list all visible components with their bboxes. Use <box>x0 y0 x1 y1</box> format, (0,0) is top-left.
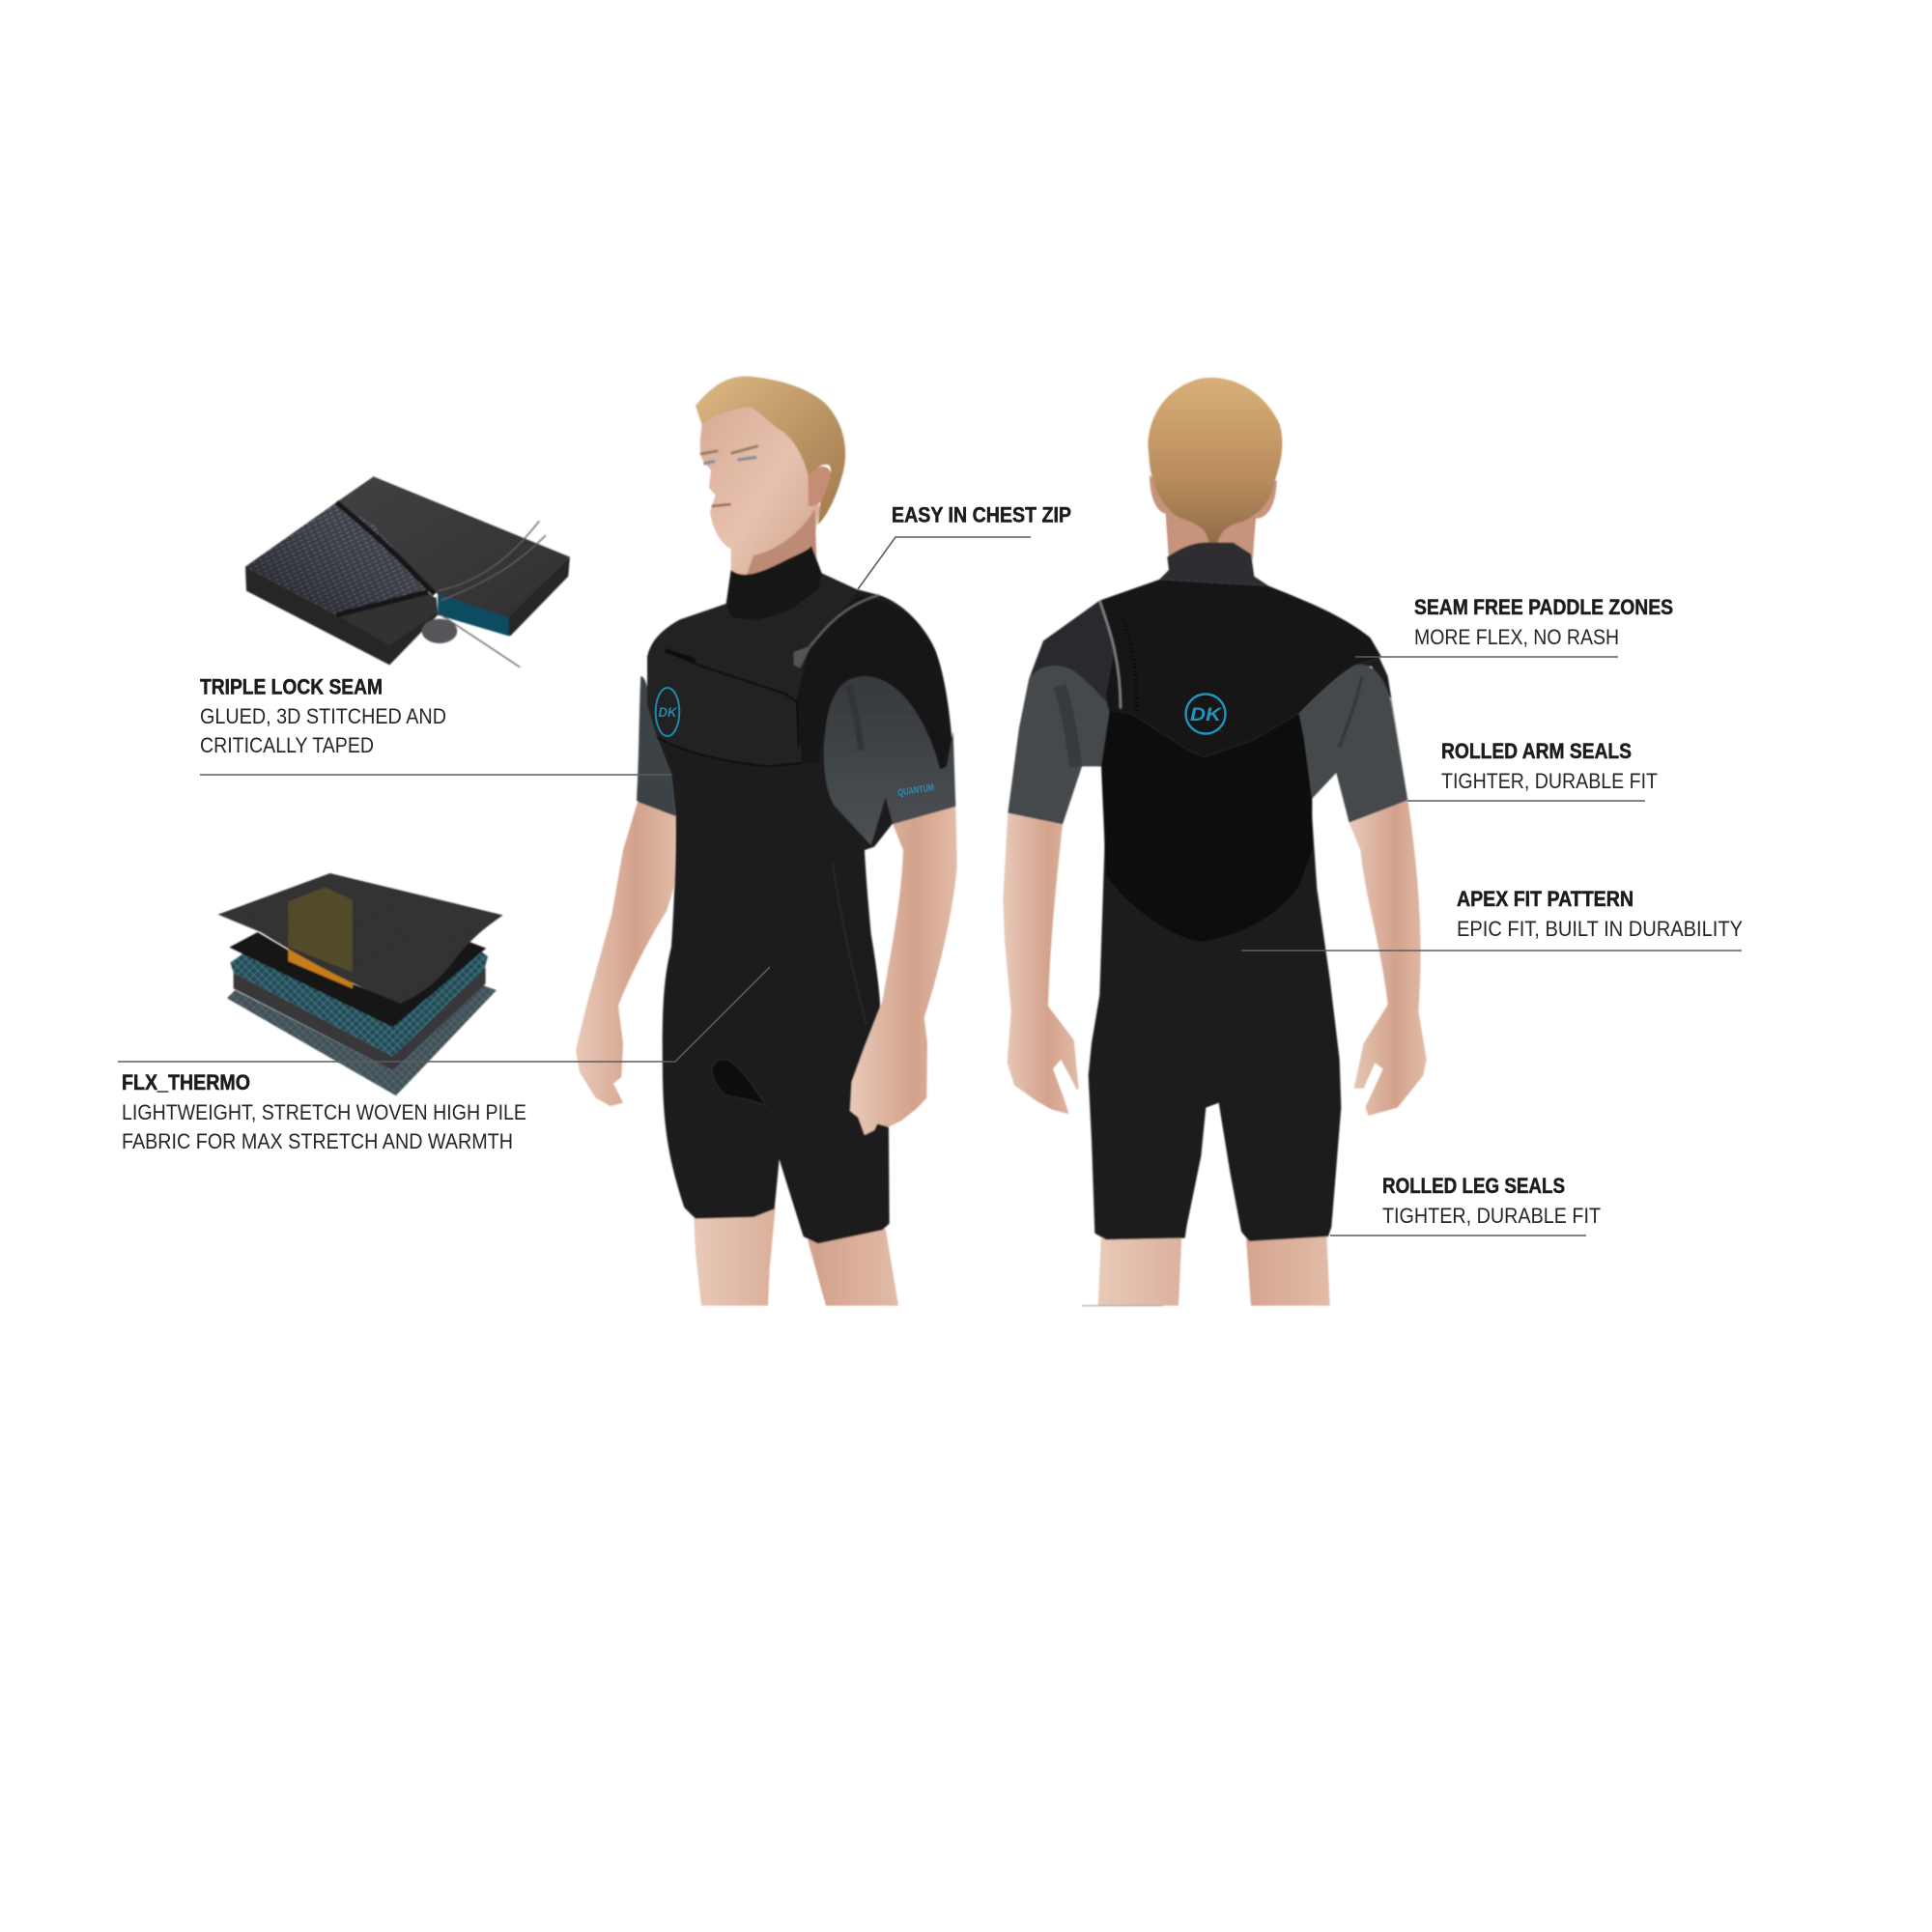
seam stitching <box>336 502 435 615</box>
right shoulder <box>797 596 953 770</box>
figure: front view wearing wetsuit <box>576 376 957 1306</box>
top fabric <box>336 476 570 617</box>
callout: flx thermo: FABRIC FOR MAX STRETCH AND WARMTH <box>122 1129 513 1153</box>
hair <box>696 376 845 525</box>
collar <box>726 546 822 619</box>
grey bottom edge <box>1082 1304 1162 1307</box>
neck and ears <box>1150 475 1277 560</box>
left arm and hand <box>576 802 675 1106</box>
dark foam block <box>234 968 486 1070</box>
side faces <box>245 557 570 665</box>
right sleeve panel <box>824 676 955 845</box>
logo: front chest <box>656 688 679 736</box>
swatch: flx thermo layers <box>218 873 503 1095</box>
side seam <box>833 863 867 1024</box>
figure: back view wearing wetsuit <box>1003 378 1427 1306</box>
callout: flx thermo: FLX_THERMO <box>122 1070 250 1094</box>
thread lines <box>438 521 546 668</box>
top sheet <box>218 873 503 1003</box>
callout: apex fit pattern <box>1241 887 1743 951</box>
callout: triple lock seam: TRIPLE LOCK SEAM <box>200 674 383 699</box>
right arm and hand <box>1350 800 1427 1116</box>
callout: seam free paddle zones: MORE FLEX, NO RASH <box>1414 625 1619 649</box>
callout: rolled arm seals: ROLLED ARM SEALS <box>1441 739 1632 763</box>
left shoulder <box>1029 601 1130 722</box>
translucent heat column <box>288 887 353 973</box>
suit body <box>647 573 953 1243</box>
mesh layer <box>230 944 488 1056</box>
callout: rolled leg seals: TIGHTER, DURABLE FIT <box>1382 1204 1601 1228</box>
left arm and hand <box>1003 813 1079 1114</box>
legs <box>694 1208 898 1306</box>
pocket and hem seams <box>657 650 802 766</box>
round tape <box>422 619 457 643</box>
right grey sleeve <box>1299 665 1407 823</box>
crotch detail <box>712 1059 766 1106</box>
chest panel <box>647 573 857 766</box>
callout: apex fit pattern: APEX FIT PATTERN <box>1457 887 1634 911</box>
back centre panel <box>1101 712 1312 942</box>
hair back <box>1148 378 1282 544</box>
callout: seam free paddle zones <box>1355 595 1673 657</box>
left sleeve <box>637 676 675 816</box>
face and neck <box>700 408 831 592</box>
zip seam <box>1099 601 1121 708</box>
callout: rolled arm seals <box>1407 739 1658 801</box>
callout: apex fit pattern: EPIC FIT, BUILT IN DURABILITY <box>1457 917 1743 941</box>
right shoulder edge <box>1355 638 1407 800</box>
callout: rolled leg seals <box>1330 1174 1601 1236</box>
callout: easy in chest zip: EASY IN CHEST ZIP <box>892 502 1071 527</box>
left grey sleeve <box>1008 666 1109 824</box>
callout: flx thermo: LIGHTWEIGHT, STRETCH WOVEN HIGH PILE <box>122 1100 526 1124</box>
callout: triple lock seam: GLUED, 3D STITCHED AND <box>200 704 446 728</box>
lower suit <box>1089 818 1341 1241</box>
callout: rolled leg seals: ROLLED LEG SEALS <box>1382 1174 1565 1198</box>
black layer <box>229 932 486 1027</box>
callout: triple lock seam: CRITICALLY TAPED <box>200 733 374 757</box>
callout: seam free paddle zones: SEAM FREE PADDLE ZONES <box>1414 595 1673 619</box>
quilted face <box>245 502 428 615</box>
sleeve brand text: QUANTUM <box>897 782 935 799</box>
callout: triple lock seam <box>200 674 671 775</box>
yoke <box>1099 580 1381 757</box>
logo: front chest: DK <box>659 704 677 720</box>
lower corner <box>336 592 437 645</box>
base layer <box>227 985 497 1095</box>
logo: back <box>1186 694 1225 734</box>
swatch: triple lock seam <box>245 476 570 668</box>
right arm and hand <box>850 807 957 1135</box>
callout: easy in chest zip <box>858 502 1071 589</box>
callout: rolled arm seals: TIGHTER, DURABLE FIT <box>1441 769 1658 793</box>
heat zone <box>288 947 353 988</box>
blue cut edge <box>438 594 509 636</box>
logo: back: DK <box>1190 705 1222 725</box>
chest zip <box>794 595 879 657</box>
collar <box>1159 542 1268 586</box>
callout: flx thermo <box>118 967 770 1153</box>
legs <box>1098 1235 1330 1306</box>
